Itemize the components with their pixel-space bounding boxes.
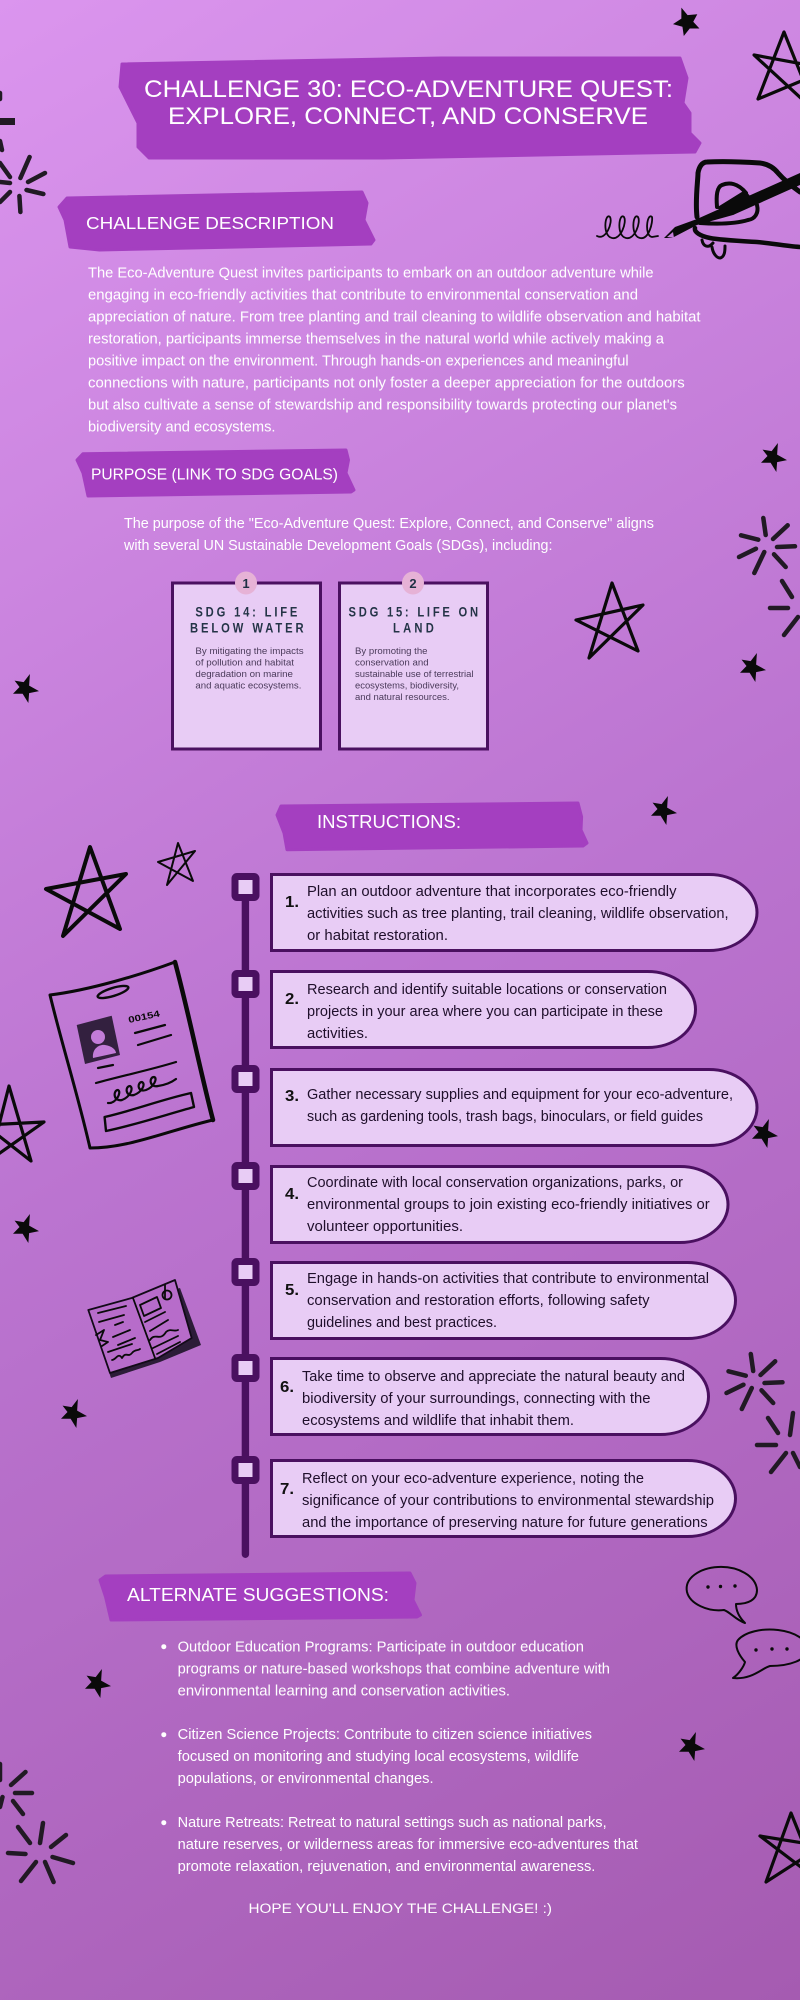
step 5: conservation and restoration efforts, following safety — [307, 1292, 650, 1309]
small star: right of suggestions — [679, 1732, 705, 1761]
step 1: 1. — [285, 894, 299, 911]
text block: suggestion 1: programs or nature-based workshops that combine adventure with — [178, 1660, 610, 1677]
text block: challenge description: engaging in eco-friendly activities that contribute to environmental conservation and — [88, 286, 638, 304]
card title: SDG 14: BELOW WATER — [190, 620, 304, 636]
step 7 — [272, 1460, 736, 1536]
step 2: projects in your area where you can participate in these — [307, 1003, 663, 1020]
panel: SDG 14 card — [172, 572, 320, 749]
badge: number 2: 2 — [409, 576, 417, 591]
sparkle burst: top left edge — [0, 93, 45, 212]
sparkle burst: right edge by step 7 — [757, 1413, 800, 1472]
step 6: 6. — [280, 1379, 294, 1396]
step 5: Engage in hands-on activities that contribute to environmental — [307, 1270, 709, 1287]
step 4: volunteer opportunities. — [307, 1218, 463, 1235]
small star: left of suggestions — [85, 1669, 111, 1698]
step 3: Gather necessary supplies and equipment for your eco-adventure, — [307, 1086, 733, 1103]
small star: right of cards — [740, 653, 766, 682]
closing message: HOPE YOU'LL ENJOY THE CHALLENGE! :) — [248, 1901, 552, 1916]
text block: suggestion 2: Citizen Science Projects: Contribute to citizen science initiatives — [178, 1726, 592, 1743]
panel: instructions heading: INSTRUCTIONS: — [317, 812, 461, 832]
text block: challenge description: biodiversity and ecosystems. — [88, 418, 276, 436]
sparkle burst: lower left — [8, 1823, 73, 1882]
card text: SDG 15: conservation and — [355, 658, 429, 668]
card text: SDG 15: and natural resources. — [355, 692, 450, 703]
text block: suggestion 1 — [161, 1638, 610, 1699]
text block: suggestion 2 — [161, 1726, 592, 1787]
timeline markers — [235, 876, 256, 1480]
step 4: environmental groups to join existing eco-friendly initiatives or — [307, 1196, 710, 1213]
title banner — [120, 58, 700, 158]
step 1: activities such as tree planting, trail cleaning, wildlife observation, — [307, 905, 729, 922]
panel: instructions heading — [277, 803, 587, 850]
step 7: Reflect on your eco-adventure experience, noting the — [302, 1470, 644, 1487]
panel: challenge description heading — [59, 192, 374, 250]
step 2: 2. — [285, 991, 299, 1008]
outline star: beside SDG cards — [576, 583, 643, 658]
panel: challenge description heading: CHALLENGE DESCRIPTION — [86, 213, 334, 233]
sparkle burst: right edge — [770, 581, 798, 635]
outline star: thin small — [158, 843, 195, 885]
title — [144, 76, 673, 130]
card text: SDG 14 — [195, 646, 304, 692]
outline star: top right — [754, 32, 800, 112]
badge: number 1 — [235, 572, 257, 594]
outline star: large left — [46, 847, 126, 936]
step 3: 3. — [285, 1088, 299, 1105]
step 4: 4. — [285, 1186, 299, 1203]
small star: left of instructions — [13, 1214, 39, 1243]
card text: SDG 15: By promoting the — [355, 646, 428, 657]
timeline: step connector — [235, 876, 256, 1558]
step 7: 7. — [280, 1481, 294, 1498]
step 2 — [272, 972, 696, 1048]
panel: purpose heading: PURPOSE (LINK TO SDG GOALS) — [91, 466, 338, 484]
step 5: 5. — [285, 1282, 299, 1299]
card text: SDG 15: sustainable use of terrestrial — [355, 669, 474, 680]
step 7: and the importance of preserving nature for future generations — [302, 1514, 708, 1531]
small star: left of cards — [13, 674, 39, 703]
icon: speech bubble upper — [687, 1567, 757, 1623]
outline star: lower right — [760, 1813, 800, 1882]
step 6 — [272, 1358, 708, 1434]
small star: top right — [673, 8, 699, 36]
step 7: significance of your contributions to environmental stewardship — [302, 1492, 714, 1509]
card text: SDG 14: of pollution and habitat — [195, 658, 294, 668]
card title: SDG 14: SDG 14: LIFE — [195, 604, 297, 620]
card title: SDG 15: LAND — [393, 620, 434, 636]
icon: ID badge — [50, 962, 213, 1148]
card title: SDG 15 — [348, 604, 478, 636]
text block: challenge description: but also cultivate a sense of stewardship and responsibility towards protecting our planet's — [88, 396, 677, 414]
panel: SDG 15 card — [340, 572, 488, 749]
text block: purpose: The purpose of the "Eco-Adventure Quest: Explore, Connect, and Conserve" aligns — [124, 515, 654, 532]
text block: challenge description: restoration, participants immerse themselves in the natural world while actively making a — [88, 330, 665, 348]
text block: suggestion 3: nature reserves, or wilderness areas for immersive eco-adventures that — [178, 1836, 639, 1853]
step 3 — [272, 1070, 757, 1146]
card text: SDG 15: ecosystems, biodiversity, — [355, 680, 459, 692]
card title: SDG 14 — [190, 604, 304, 636]
text block: challenge description — [88, 264, 701, 436]
outline star: left edge — [0, 1086, 44, 1161]
small star: right of instructions heading — [651, 796, 677, 825]
step 4: Coordinate with local conservation organizations, parks, or — [307, 1174, 683, 1191]
text block: suggestion 3: Nature Retreats: Retreat to natural settings such as national parks, — [178, 1814, 607, 1831]
card text: SDG 14: and aquatic ecosystems. — [195, 680, 301, 692]
small star: over step 3 — [752, 1119, 778, 1148]
step 1: Plan an outdoor adventure that incorporates eco-friendly — [307, 883, 677, 900]
step 5 — [272, 1262, 736, 1338]
text block: challenge description: The Eco-Adventure Quest invites participants to embark on an outdoor adventure while — [88, 264, 654, 282]
title: EXPLORE, CONNECT, AND CONSERVE — [168, 103, 648, 130]
sparkle burst: right of step 6 — [726, 1354, 782, 1409]
icon: speech bubble lower — [733, 1629, 800, 1678]
card text: SDG 14: By mitigating the impacts — [195, 646, 304, 657]
badge: number 1: 1 — [242, 576, 250, 591]
step 6: Take time to observe and appreciate the natural beauty and — [302, 1368, 685, 1385]
step 1: or habitat restoration. — [307, 927, 448, 944]
text block: suggestion 2: populations, or environmental changes. — [178, 1770, 434, 1787]
sparkle burst: right of purpose — [739, 518, 795, 573]
panel: alternate suggestions heading — [100, 1573, 420, 1620]
card text: SDG 15 — [355, 646, 474, 703]
text block: suggestion 1: environmental learning and conservation activities. — [178, 1682, 510, 1699]
step 2: activities. — [307, 1025, 368, 1042]
step 1 — [272, 874, 757, 950]
badge: number 2 — [402, 572, 424, 594]
step 6: ecosystems and wildlife that inhabit them. — [302, 1412, 574, 1429]
text block: suggestion 2: focused on monitoring and studying local ecosystems, wildlife — [178, 1748, 579, 1765]
card title: SDG 15: SDG 15: LIFE ON — [348, 604, 478, 620]
text block: purpose: with several UN Sustainable Development Goals (SDGs), including: — [123, 537, 553, 554]
text block: purpose — [123, 515, 654, 554]
title: CHALLENGE 30: ECO-ADVENTURE QUEST: — [144, 76, 673, 103]
step 5: guidelines and best practices. — [307, 1314, 497, 1331]
step 2: Research and identify suitable locations or conservation — [307, 981, 667, 998]
sparkle burst: lower left edge — [0, 1764, 32, 1814]
small star: lower left — [61, 1399, 87, 1428]
step 6: biodiversity of your surroundings, connecting with the — [302, 1390, 650, 1407]
text block: challenge description: connections with nature, participants not only foster a deeper appreciation for the outdoors — [88, 374, 685, 392]
text block: suggestion 3: promote relaxation, rejuvenation, and environmental awareness. — [178, 1858, 595, 1875]
icon: ID badge: 00154 — [127, 1009, 161, 1025]
step 3: such as gardening tools, trash bags, binoculars, or field guides — [307, 1108, 703, 1125]
step 4 — [272, 1166, 728, 1242]
card text: SDG 14: degradation on marine — [195, 669, 293, 680]
panel: purpose heading — [77, 450, 354, 496]
text block: suggestion 3 — [161, 1814, 639, 1875]
text block: challenge description: appreciation of nature. From tree planting and trail cleaning to wildlife observation and habitat — [88, 308, 701, 326]
icon: hand writing with pen and squiggle — [597, 162, 800, 258]
icon: open book — [88, 1280, 201, 1378]
panel: alternate suggestions heading: ALTERNATE SUGGESTIONS: — [127, 1585, 389, 1605]
text block: challenge description: positive impact on the environment. Through hands-on experiences and meaningful — [88, 352, 629, 370]
text block: suggestion 1: Outdoor Education Programs: Participate in outdoor education — [178, 1638, 584, 1655]
small star: right of purpose — [761, 443, 787, 472]
